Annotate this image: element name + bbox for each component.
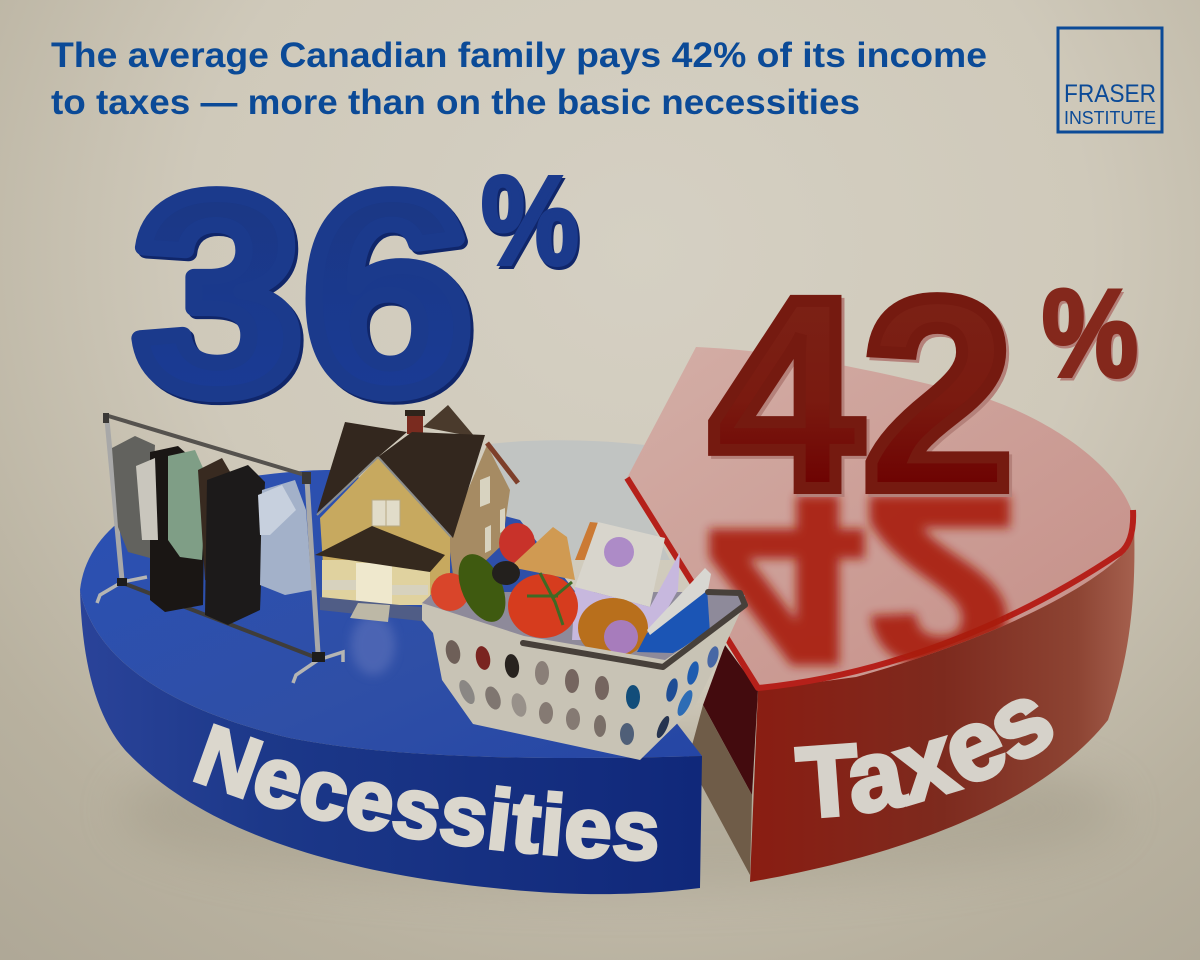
slice top xyxy=(627,347,1133,690)
food: small tomato xyxy=(431,573,469,611)
foundation xyxy=(320,597,430,622)
porch roof xyxy=(315,526,445,572)
basket holes xyxy=(444,639,721,745)
slice top xyxy=(80,470,702,758)
front wall xyxy=(320,458,450,595)
big number: 42% xyxy=(710,242,1140,549)
big number: 42%: % xyxy=(1044,268,1140,406)
basket rim xyxy=(523,592,745,667)
red rim xyxy=(627,478,1133,688)
big number: 42%: 42 xyxy=(713,245,1017,549)
side wall xyxy=(448,445,510,590)
big number: 36%: % xyxy=(483,153,581,294)
long black coat xyxy=(205,465,265,625)
label: Necessities: Necessities xyxy=(192,723,658,862)
big number: 36%: % xyxy=(481,150,579,291)
black dress with white sleeve xyxy=(150,446,205,612)
chimney xyxy=(407,414,423,434)
floor shadow wedge xyxy=(688,705,752,875)
food: tomato xyxy=(508,574,578,638)
icon: grocery basket xyxy=(422,522,745,760)
big number: 42%: % xyxy=(1042,265,1138,403)
big number: 42%: 42 xyxy=(710,242,1014,546)
rack feet xyxy=(97,577,343,683)
food: donut xyxy=(578,598,648,658)
back roof xyxy=(423,405,475,437)
title xyxy=(51,36,987,122)
food: milk carton xyxy=(575,522,665,607)
food: bread xyxy=(510,527,575,580)
green hoodie xyxy=(168,450,207,560)
title: The average Canadian family pays 42% of its income xyxy=(51,36,987,75)
food: blue box xyxy=(637,588,710,653)
big number: 36%: 36 xyxy=(133,136,473,451)
porch body xyxy=(322,560,430,605)
title: to taxes — more than on the basic necessities xyxy=(51,83,860,122)
big number: 36%: 36 xyxy=(136,139,476,454)
floor shadow xyxy=(120,730,1120,890)
basket back xyxy=(422,592,745,668)
side eave xyxy=(487,443,518,483)
logo: Fraser Institute: INSTITUTE xyxy=(1064,108,1156,128)
back disc remainder xyxy=(490,440,670,560)
brown jacket xyxy=(198,458,236,585)
grey jacket xyxy=(112,436,155,558)
icon: house xyxy=(315,405,518,622)
left roof xyxy=(317,422,407,513)
food: cucumber xyxy=(449,547,515,629)
food: red pepper xyxy=(499,523,535,563)
big number: 36% xyxy=(133,136,581,454)
panel: blue necessities slice xyxy=(80,470,702,894)
blue dress xyxy=(260,480,312,595)
slice side xyxy=(750,520,1134,882)
logo: Fraser Institute xyxy=(1058,28,1162,132)
mirrored reflection of 42: 42 xyxy=(708,447,1018,714)
basket body xyxy=(422,603,743,760)
logo: Fraser Institute: FRASER xyxy=(1064,80,1156,108)
centre roof xyxy=(378,432,485,538)
dark cut wall xyxy=(703,645,758,795)
food: dark jar xyxy=(492,561,520,585)
panel: red taxes slice xyxy=(624,347,1136,882)
slice side xyxy=(80,590,702,894)
lighter reflection xyxy=(351,615,395,675)
icon: clothes rack xyxy=(97,413,343,683)
steps xyxy=(350,603,390,622)
windows xyxy=(372,500,400,526)
label: Taxes: Taxes xyxy=(794,698,1054,818)
